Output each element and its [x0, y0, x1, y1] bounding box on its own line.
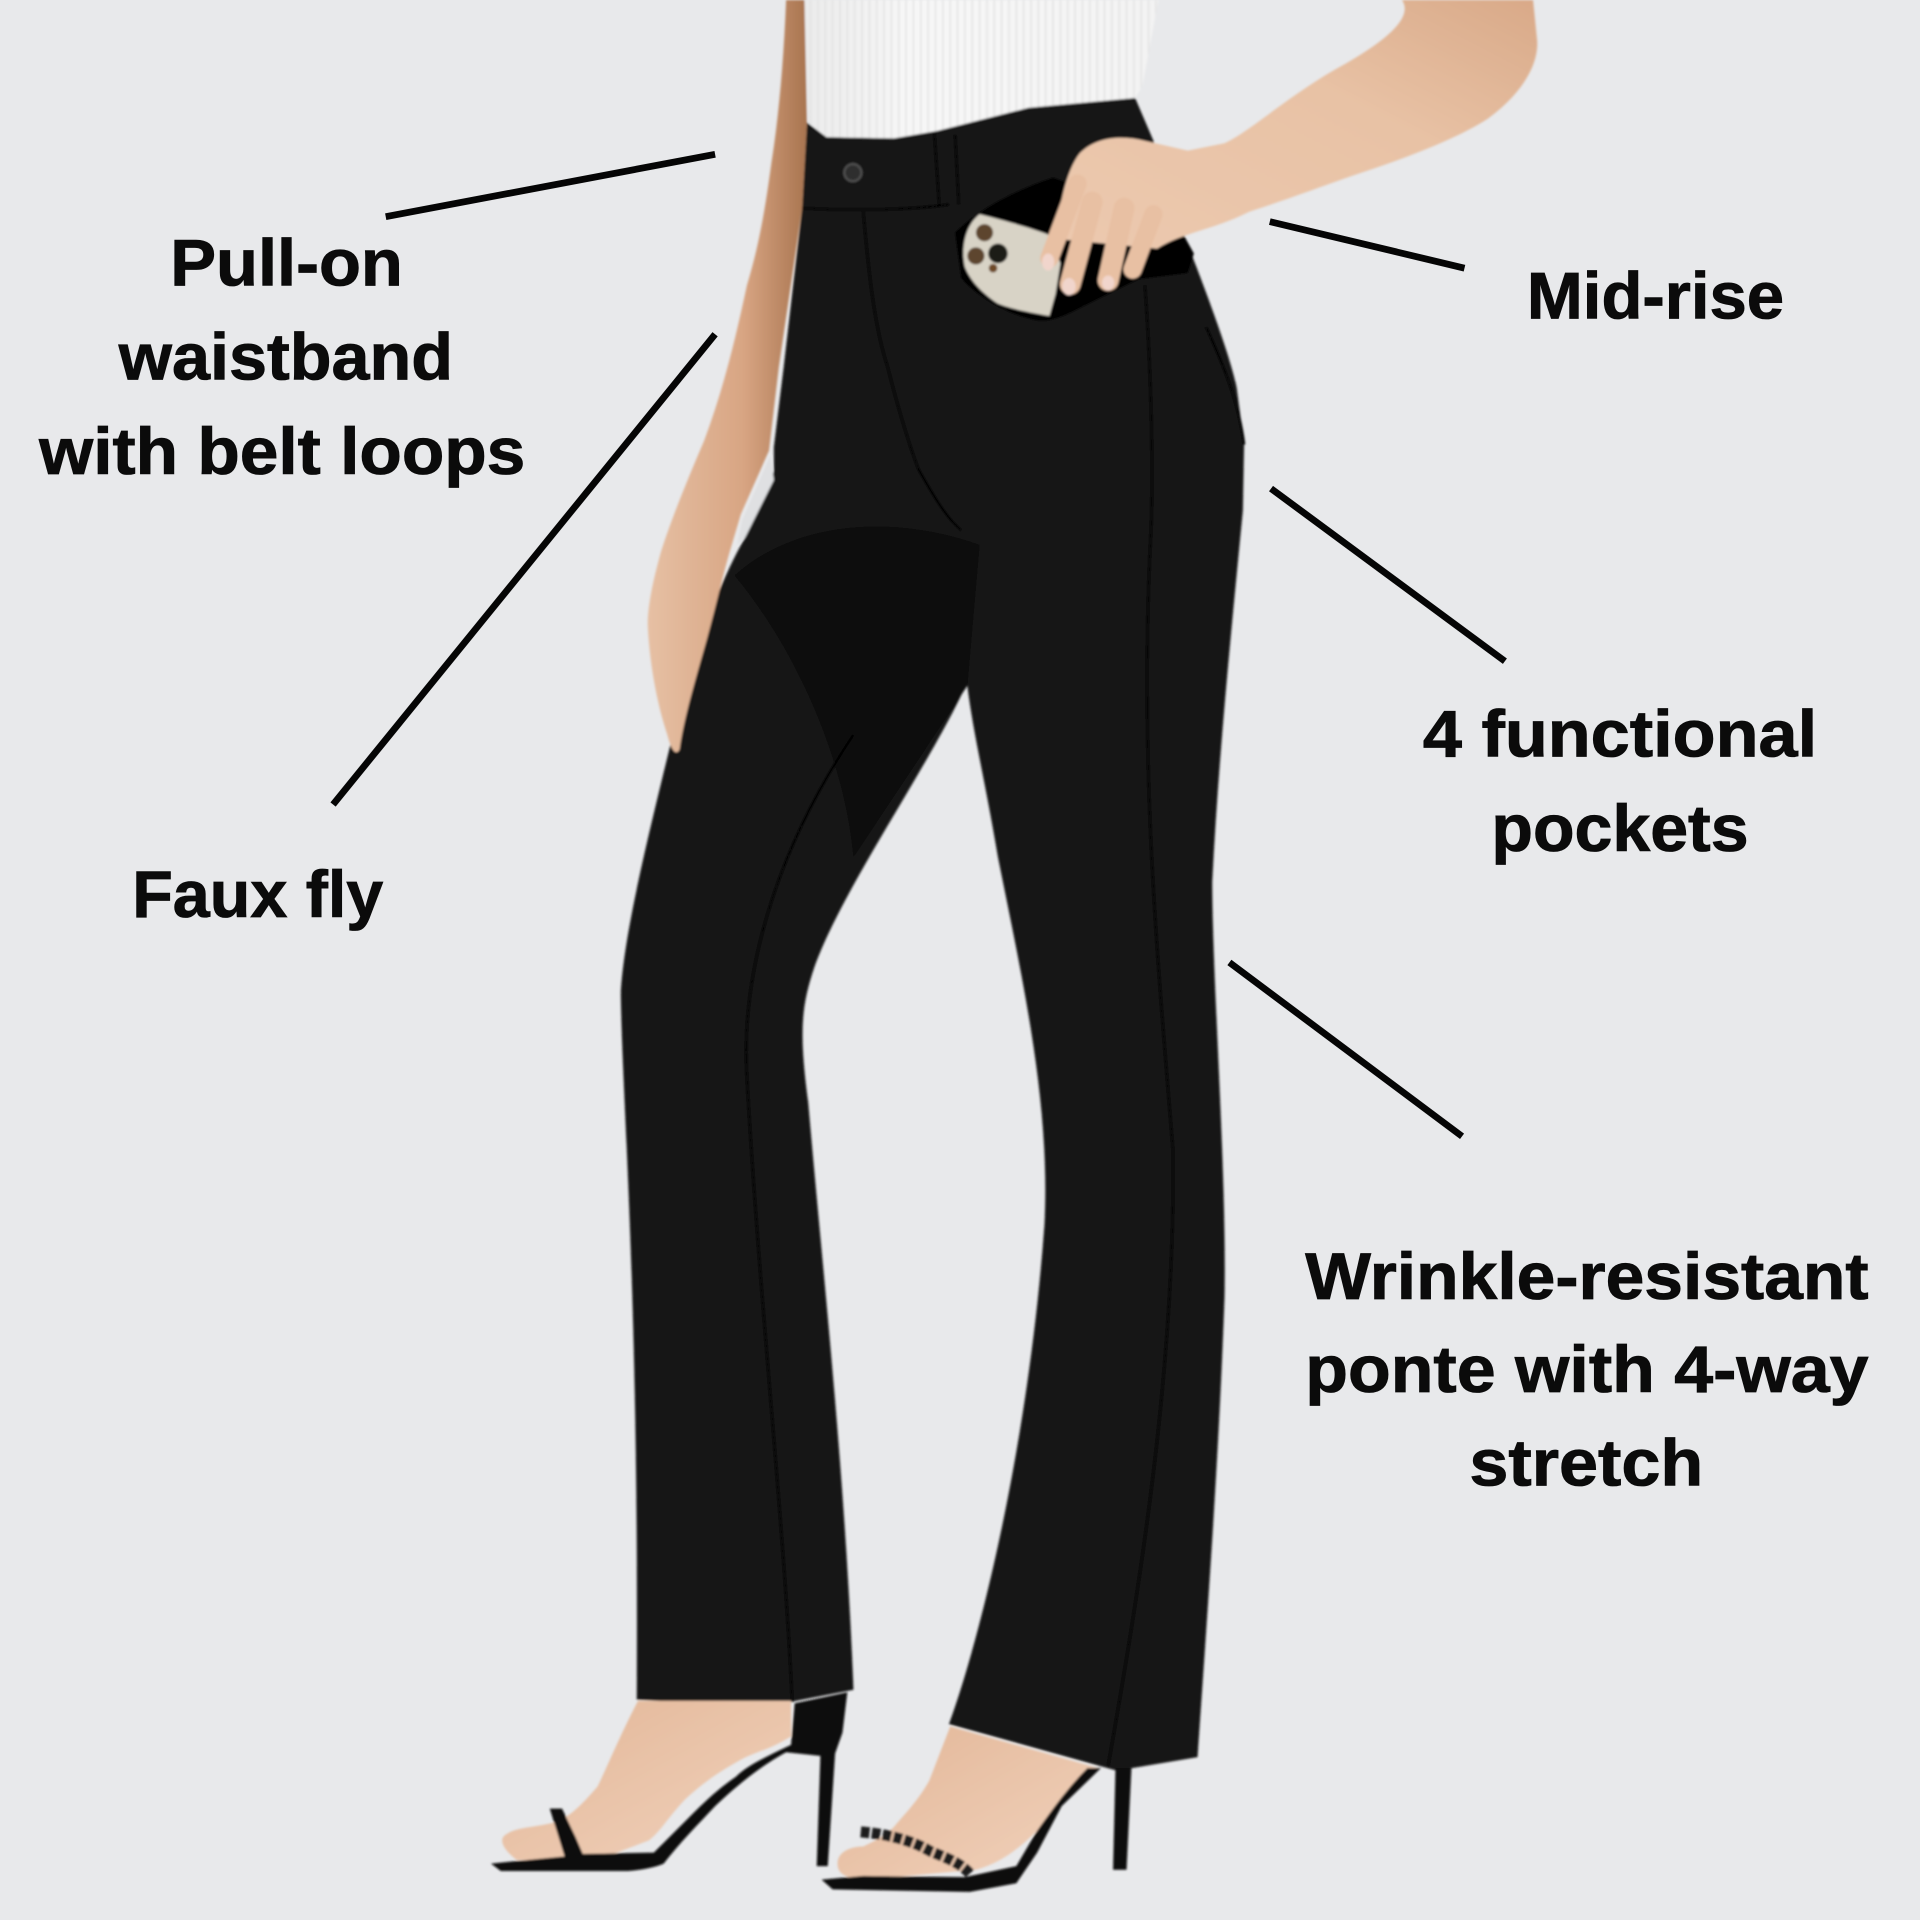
rear foot — [502, 1701, 791, 1860]
label: pull-on waistband: Pull-on — [170, 226, 403, 300]
arm and palm — [1056, 0, 1537, 249]
label: wrinkle-resistant ponte — [1305, 1240, 1869, 1500]
label: 4 functional pockets: pockets — [1491, 792, 1749, 866]
label: wrinkle-resistant ponte: Wrinkle-resistant — [1305, 1240, 1869, 1314]
callout line: faux fly — [333, 334, 715, 804]
waistband seam — [802, 204, 949, 210]
front foot — [838, 1727, 1098, 1880]
label: 4 functional pockets — [1423, 698, 1817, 866]
side seam — [1108, 285, 1173, 1766]
label: faux fly: Faux fly — [132, 858, 383, 932]
pocket opening — [955, 178, 1194, 321]
pants: front leg and waist — [747, 98, 1244, 1771]
top: white ribbed shirt — [804, 0, 1158, 138]
back pocket seam — [1206, 327, 1244, 444]
rear leg seam — [746, 735, 853, 1702]
belt loop — [934, 132, 959, 204]
left arm and hand — [648, 0, 807, 752]
phone body — [963, 214, 1060, 316]
label: wrinkle-resistant ponte: stretch — [1469, 1426, 1703, 1500]
label: pull-on waistband: waistband — [118, 321, 453, 395]
callout line: mid-rise — [1270, 222, 1464, 268]
fingernails — [1042, 253, 1114, 295]
label: wrinkle-resistant ponte: ponte with 4-way — [1305, 1333, 1869, 1407]
rear shoe — [491, 1692, 847, 1871]
fingers — [1049, 184, 1153, 284]
callout line: functional pockets — [1271, 489, 1505, 661]
label: mid-rise: Mid-rise — [1527, 259, 1784, 333]
pants: rear leg — [621, 471, 973, 1704]
callout line: wrinkle-resistant — [1229, 962, 1462, 1136]
phone — [963, 214, 1060, 316]
crotch shadow — [735, 527, 980, 857]
phone cameras — [976, 224, 993, 241]
seams — [746, 132, 1244, 1766]
label: pull-on waistband — [38, 226, 525, 489]
center front seam — [863, 212, 961, 530]
toe chain strap — [861, 1832, 970, 1873]
label: 4 functional pockets: 4 functional — [1423, 698, 1817, 772]
callout line: pull-on waistband — [386, 154, 715, 217]
gap between arm and hip — [737, 456, 774, 545]
waistband button — [844, 164, 861, 181]
label: pull-on waistband: with belt loops — [38, 415, 525, 489]
model photo illustration — [491, 0, 1537, 1892]
right arm and hand — [1042, 0, 1537, 295]
front shoe — [822, 1768, 1131, 1892]
